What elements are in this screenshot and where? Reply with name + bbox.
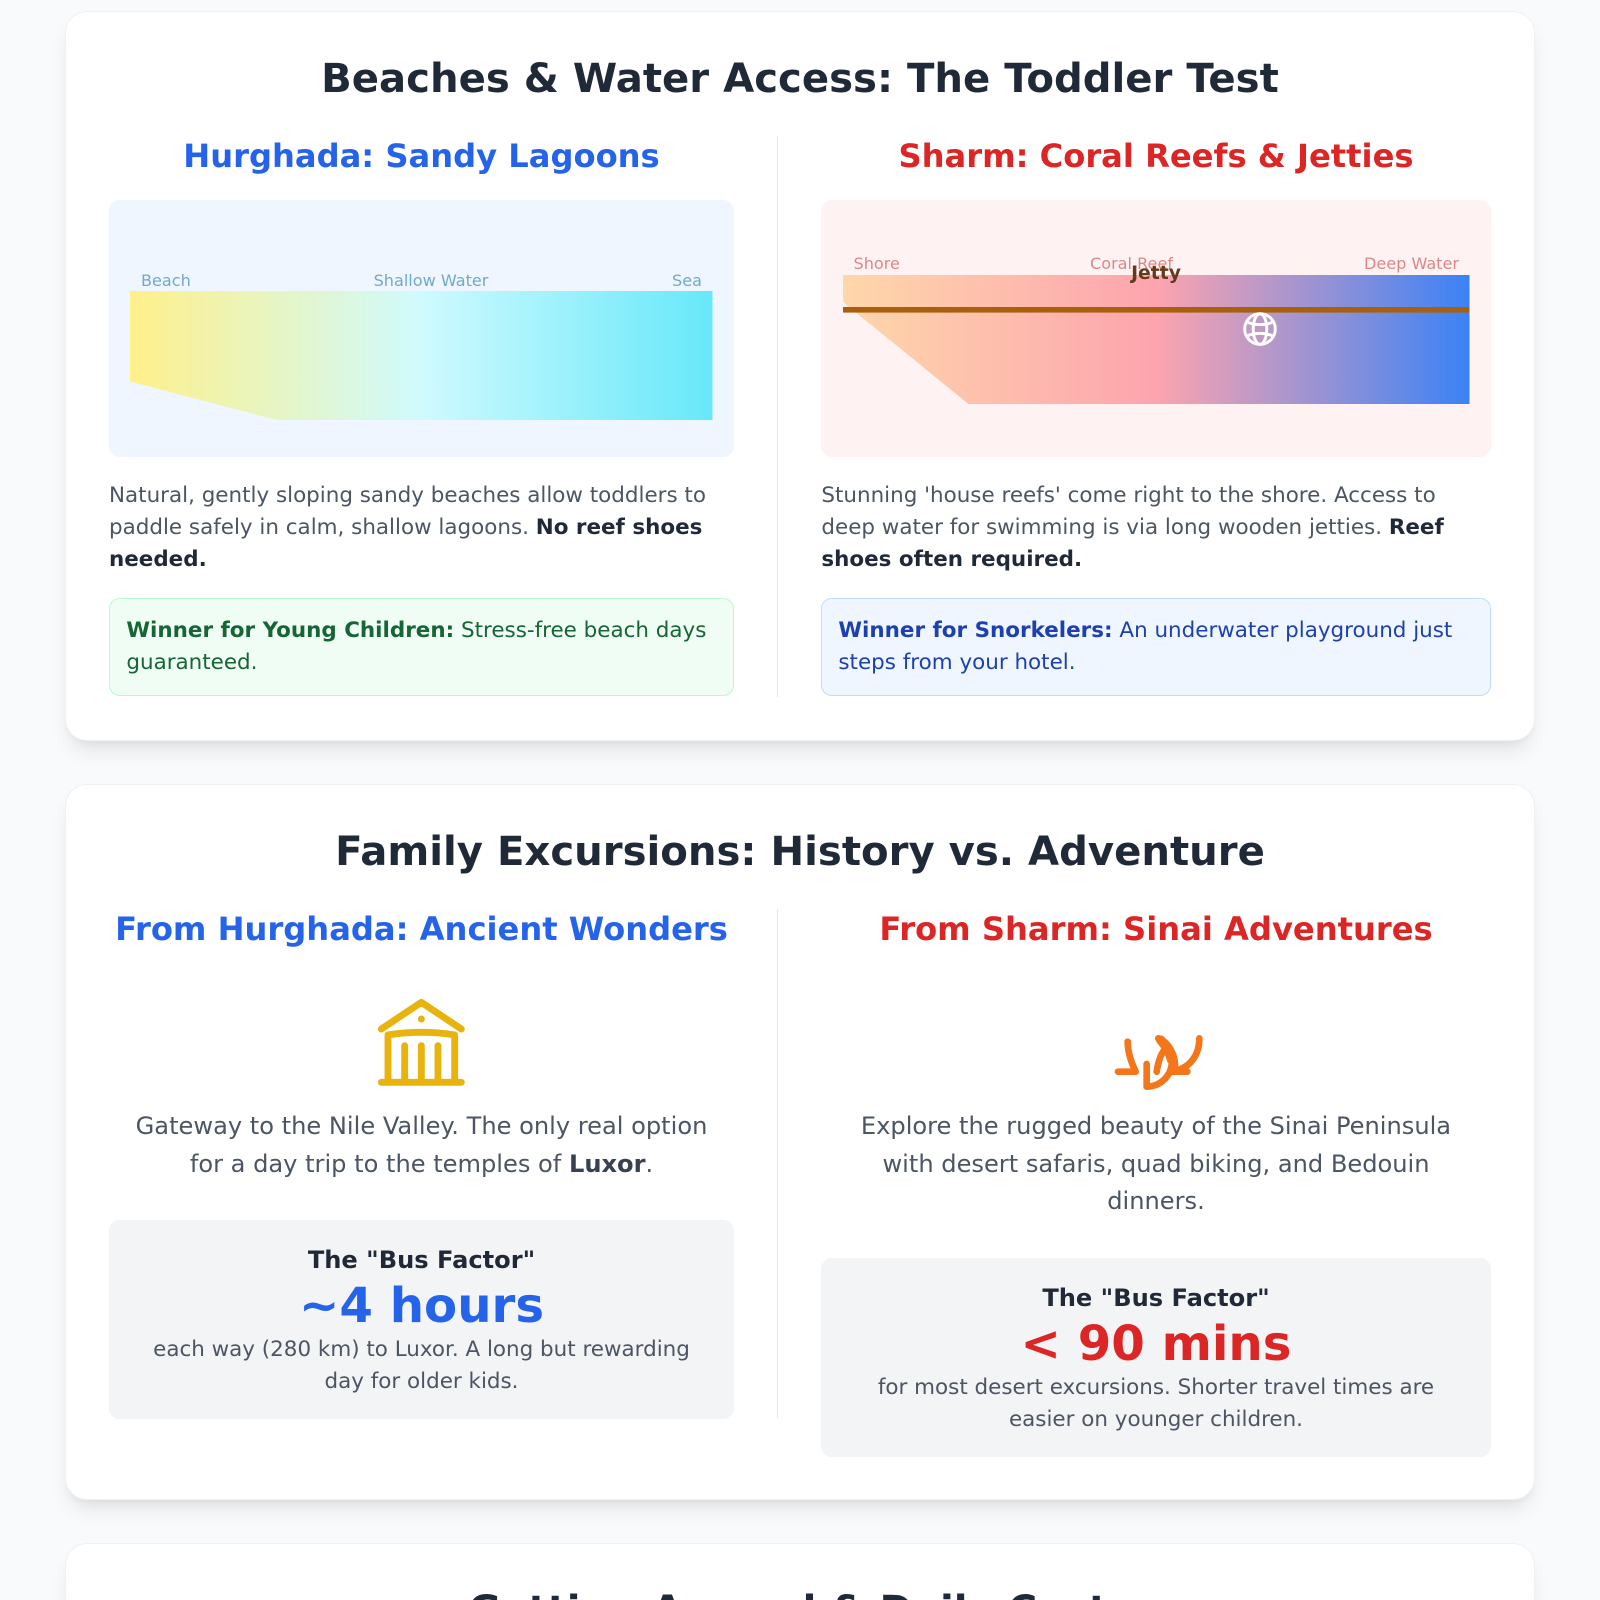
callout: winner for snorkelers: steps from your hotel. xyxy=(838,650,1076,675)
text: Sharm excursion description: with desert safaris, quad biking, and Bedouin xyxy=(882,1150,1430,1178)
icon: desert camel xyxy=(1114,1035,1203,1090)
column divider xyxy=(777,909,778,1418)
note: Luxor travel xyxy=(153,1336,690,1394)
note: desert travel xyxy=(878,1374,1434,1432)
text: Sharm reef description: Stunning 'house reefs' come right to the shore. Access to xyxy=(821,483,1436,508)
heading: from Hurghada: From Hurghada: Ancient Wonders xyxy=(115,910,728,948)
text: Sharm reef description: shoes often required. xyxy=(821,547,1082,572)
text: Hurghada beach description xyxy=(109,483,706,572)
icon: temple building xyxy=(378,998,465,1086)
callout: winner for snorkelers: Winner for Snorkelers: An underwater playground just xyxy=(838,618,1452,643)
stat: four hours: ~4 hours xyxy=(299,1278,544,1334)
text: Hurghada beach description: needed. xyxy=(109,547,207,572)
callout: Hurghada bus factor xyxy=(109,1220,734,1418)
stat: ninety minutes: < 90 mins xyxy=(1021,1316,1291,1372)
panel: getting around xyxy=(66,1544,1534,1600)
callout: winner for young children: Winner for Young Children: Stress-free beach days xyxy=(126,618,706,643)
diagram: Sharm reef and jetty profile: Shore xyxy=(854,254,900,273)
text: Hurghada beach description: Natural, gently sloping sandy beaches allow toddlers to xyxy=(109,483,706,508)
label: bus factor: The "Bus Factor" xyxy=(308,1246,535,1274)
text: Hurghada excursion description: for a day trip to the temples of Luxor. xyxy=(190,1150,653,1178)
diagram: Hurghada beach profile: Sea xyxy=(672,271,702,290)
diagram: Hurghada beach profile: Beach xyxy=(141,271,191,290)
note: Luxor travel: day for older kids. xyxy=(324,1369,518,1394)
diagram: Sharm reef and jetty profile: Jetty xyxy=(1129,263,1181,284)
title: beaches: Beaches & Water Access: The Toddler Test xyxy=(321,56,1279,102)
text: Sharm reef description xyxy=(821,483,1444,572)
text: Sharm excursion description xyxy=(861,1112,1451,1215)
callout: winner for young children xyxy=(109,598,734,696)
text: Hurghada excursion description xyxy=(136,1112,707,1178)
title: excursions: Family Excursions: History vs. Adventure xyxy=(335,829,1265,875)
heading: from Sharm: From Sharm: Sinai Adventures xyxy=(879,910,1433,948)
diagram: Hurghada beach profile xyxy=(109,200,734,457)
panel: beaches and water access xyxy=(66,12,1534,740)
callout: winner for snorkelers xyxy=(821,598,1491,696)
text: Hurghada excursion description: Gateway to the Nile Valley. The only real option xyxy=(136,1112,707,1140)
diagram: Sharm reef and jetty profile xyxy=(821,200,1491,457)
callout: winner for young children: guaranteed. xyxy=(126,650,257,675)
heading: Sharm coral reefs: Sharm: Coral Reefs & Jetties xyxy=(898,137,1414,175)
note: desert travel: for most desert excursions. Shorter travel times are xyxy=(878,1374,1434,1400)
label: bus factor: The "Bus Factor" xyxy=(1042,1284,1270,1312)
panel: family excursions xyxy=(66,785,1534,1499)
text: Hurghada beach description: paddle safely in calm, shallow lagoons. No reef shoes xyxy=(109,515,702,540)
column divider xyxy=(777,136,778,697)
text: Sharm excursion description: dinners. xyxy=(1107,1187,1205,1215)
note: desert travel: easier on younger children. xyxy=(1009,1407,1303,1432)
diagram: Sharm reef and jetty profile: Deep Water xyxy=(1364,254,1459,273)
callout: Sharm bus factor xyxy=(821,1258,1491,1456)
note: Luxor travel: each way (280 km) to Luxor. A long but rewarding xyxy=(153,1336,690,1362)
text: Sharm reef description: deep water for swimming is via long wooden jetties. Reef xyxy=(821,515,1444,540)
diagram: Hurghada beach profile: Shallow Water xyxy=(374,271,489,290)
diagram: Sharm reef and jetty profile: Coral Reef xyxy=(1090,254,1173,273)
heading: Hurghada sandy lagoons: Hurghada: Sandy Lagoons xyxy=(183,137,660,175)
text: Sharm excursion description: Explore the rugged beauty of the Sinai Peninsula xyxy=(861,1112,1451,1140)
